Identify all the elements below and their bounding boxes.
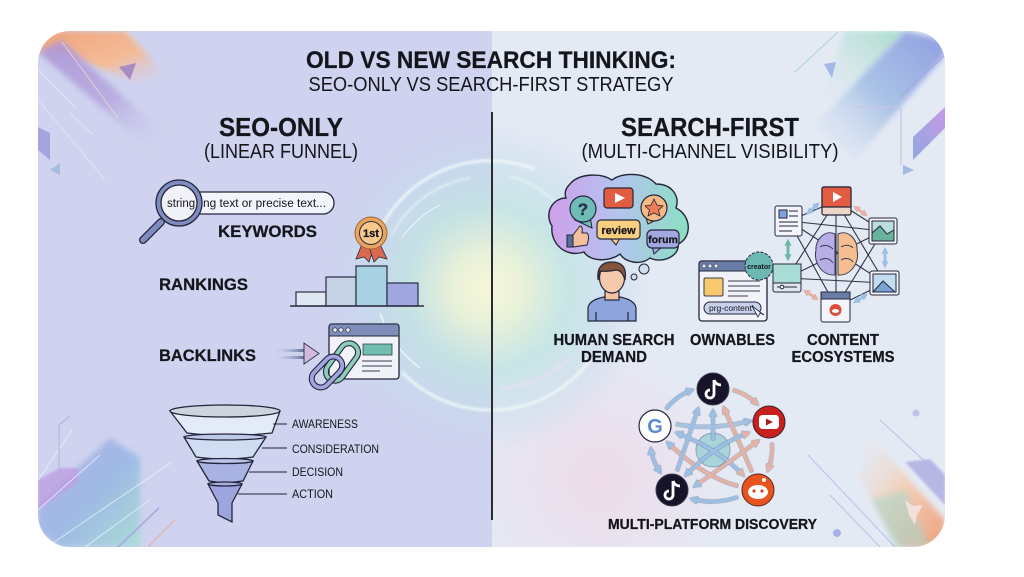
icon: browser window with chain link [308, 324, 399, 391]
icon: YouTube [753, 406, 785, 438]
icon: person [588, 262, 636, 321]
icon: magnifier [143, 180, 202, 240]
funnel [170, 405, 287, 522]
funnel tier: consideration [184, 434, 266, 459]
heading: search-first: (MULTI-CHANNEL VISIBILITY) [582, 141, 838, 163]
title: OLD VS NEW SEARCH THINKING: [306, 47, 676, 74]
icon: first-place medal: 1st [363, 228, 379, 240]
node: document [775, 206, 802, 236]
label: content ecosystems: ECOSYSTEMS [792, 349, 894, 366]
funnel labels: AWARENESS [292, 417, 358, 431]
title: SEO-ONLY VS SEARCH-FIRST STRATEGY [308, 74, 674, 96]
icon: Google: G [647, 416, 663, 438]
decoration: top-right corner [795, 31, 945, 175]
bubble: review [597, 220, 640, 245]
heading: search-first: SEARCH-FIRST [621, 112, 799, 142]
panel: background [38, 31, 945, 547]
bar chart: rankings [290, 266, 424, 306]
platform arrows [651, 390, 772, 502]
icon: TikTok bottom [656, 474, 688, 506]
label: backlinks: BACKLINKS [159, 346, 256, 365]
funnel tier: decision [197, 458, 253, 482]
heading: SEO-only [204, 112, 358, 163]
icon: star bubble [641, 195, 667, 224]
funnel labels: CONSIDERATION [292, 442, 379, 456]
network lines [787, 201, 885, 307]
label: human search demand: DEMAND [581, 349, 647, 366]
thought cloud [549, 174, 688, 262]
icon: Reddit [742, 474, 774, 506]
bubble: forum [647, 230, 679, 254]
infographic [38, 31, 945, 547]
arrows between nodes [788, 204, 885, 302]
label: keywords: KEYWORDS [218, 222, 317, 241]
node: video two [773, 264, 801, 292]
icon: question bubble [570, 196, 596, 228]
icon: magnifier: string [167, 198, 195, 210]
keywords: search bar and magnifier [143, 180, 334, 240]
icon: brain [815, 233, 858, 275]
funnel tier: awareness [170, 405, 280, 436]
label: human search demand: HUMAN SEARCH [554, 332, 674, 349]
content ecosystem network [773, 187, 899, 322]
funnel labels [292, 417, 379, 501]
arrow: backlinks [272, 343, 319, 364]
label: multi-platform discovery: MULTI-PLATFORM DISCOVERY [608, 517, 817, 533]
decoration: bottom-left corner [38, 416, 175, 547]
bubble: forum: forum [648, 234, 678, 246]
heading: SEO-only: SEO-ONLY [219, 112, 343, 142]
funnel labels: DECISION [292, 465, 343, 479]
funnel labels: ACTION [292, 487, 333, 501]
ownables: browser: prg-content' [709, 303, 754, 313]
bubble: review: review [601, 225, 636, 237]
node: reddit window [821, 292, 850, 322]
search pill [180, 192, 334, 214]
funnel tier: action [208, 482, 242, 522]
label: ownables: OWNABLES [690, 332, 775, 349]
thought bubbles [631, 264, 649, 280]
node: video [822, 187, 851, 215]
multi-platform discovery network [639, 373, 785, 506]
decoration: top-left corner [38, 31, 165, 180]
heading: search-first [582, 112, 838, 163]
icon: thumbs up [567, 226, 588, 247]
node: image two [870, 271, 899, 295]
label: content ecosystems: CONTENT [807, 332, 880, 349]
title [306, 47, 676, 96]
label: human search demand [554, 332, 674, 366]
icon: first-place medal [355, 217, 387, 262]
icon: TikTok top [697, 373, 729, 405]
heading: SEO-only: (LINEAR FUNNEL) [204, 141, 358, 163]
icon: video play [604, 188, 633, 208]
node: image one [869, 218, 897, 244]
center orb [696, 433, 730, 467]
icon: Google [639, 410, 671, 442]
badge: creator [745, 252, 773, 280]
decoration: bottom-right corner [808, 410, 945, 547]
icon: chain link [308, 340, 362, 391]
icon: question bubble: ? [578, 200, 588, 219]
human search demand: thought cloud and person [549, 174, 688, 321]
ownables: browser [699, 261, 767, 321]
label: content ecosystems [792, 332, 894, 366]
label: rankings: RANKINGS [159, 275, 248, 294]
badge: creator: creator [747, 264, 771, 271]
center divider [491, 112, 493, 520]
search pill: ng text or precise text... [203, 198, 326, 210]
